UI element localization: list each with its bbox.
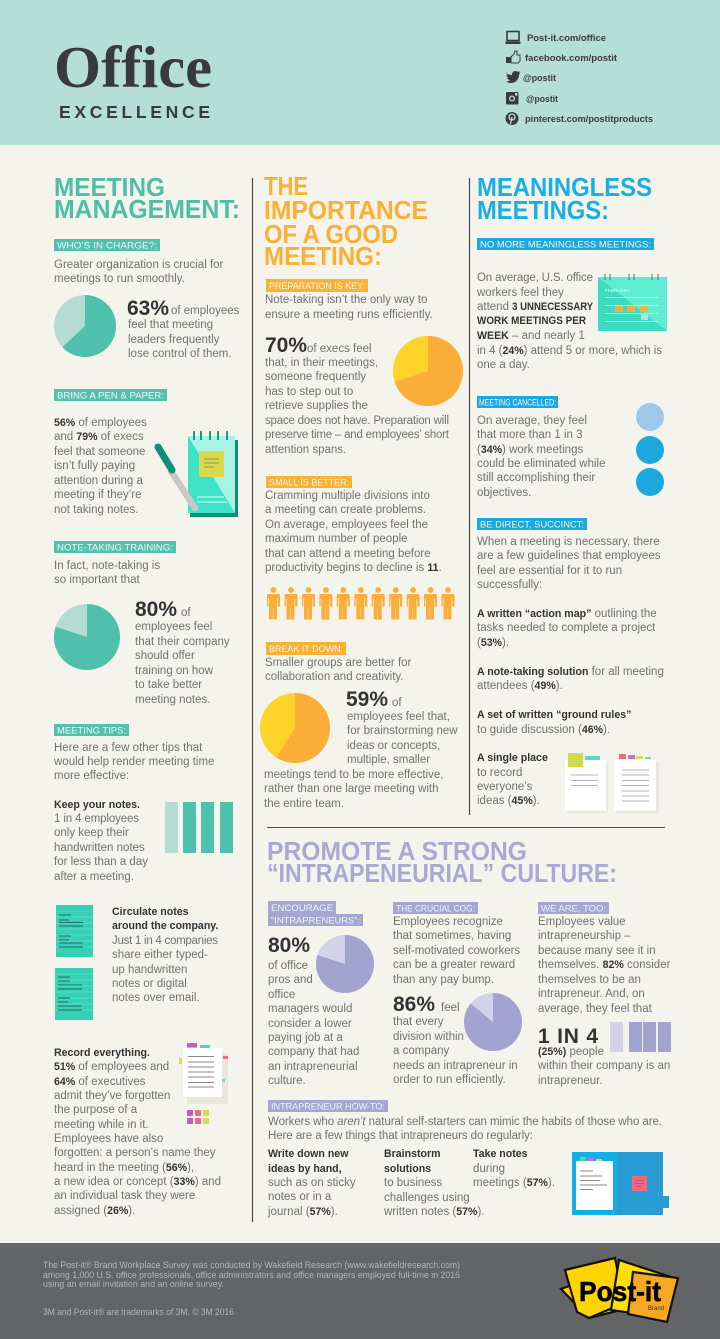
- heading: IMPORTANCE: [264, 197, 428, 225]
- heading: MANAGEMENT:: [54, 196, 240, 224]
- text block: Employees value: [538, 916, 626, 928]
- tip: record everything: the purpose of a: [54, 1104, 138, 1116]
- icon: thumbs up: [506, 51, 520, 63]
- guideline: action map: [477, 608, 657, 649]
- stat: 86%: that every: [393, 1016, 444, 1028]
- heading: [54, 174, 240, 224]
- text block: and 79% of execs: [54, 431, 144, 443]
- survey note: The Post-it® Brand Workplace Survey was conducted by Wakefield Research (www.wakefieldresearch.com): [43, 1260, 460, 1270]
- text block: more effective:: [54, 770, 129, 782]
- link: pinterest: pinterest.com/postitproducts: [525, 114, 653, 124]
- text block: because many see it in: [538, 945, 656, 957]
- pie chart: 70%: [393, 336, 463, 406]
- icon: instagram: [506, 92, 518, 104]
- tag: the crucial cog: THE CRUCIAL COG:: [396, 902, 475, 914]
- tag: encourage intrapreneurs: ENCOURAGE: [271, 902, 333, 913]
- text block: Note-taking isn’t the only way to: [265, 294, 427, 306]
- pie chart: 86%: [464, 993, 522, 1051]
- tip: circulate notes: [112, 906, 218, 1004]
- bar graphic: 1 in 4: [610, 1022, 671, 1052]
- text block: attend 3 UNNECESSARY: [477, 301, 593, 313]
- heading: PROMOTE A STRONG: [267, 838, 527, 866]
- guideline: action map: tasks needed to complete a project: [477, 622, 656, 634]
- tip: circulate notes: share either typed-: [112, 949, 208, 961]
- text block: [393, 916, 520, 986]
- habit: brainstorm: challenges using: [384, 1192, 470, 1204]
- habit: take notes: [473, 1148, 555, 1189]
- habit: write down ideas: [267, 1148, 356, 1218]
- text block: [54, 560, 160, 586]
- logo: Post-it Brand: [561, 1258, 678, 1322]
- stat: 70%: retrieve supplies the: [265, 400, 368, 412]
- text block: ensure a meeting runs efficiently.: [265, 309, 433, 321]
- tag: meeting tips: MEETING TIPS:: [57, 724, 126, 736]
- pie chart: 63%: [54, 295, 116, 357]
- tip: circulate notes: notes over email.: [112, 992, 200, 1004]
- stat: 63%: leaders frequently: [128, 334, 220, 346]
- text block: self-motivated coworkers: [393, 945, 520, 957]
- tag: small is better: SMALL IS BETTER:: [269, 476, 349, 488]
- guideline: single place: [477, 752, 548, 807]
- stat: 80%: company that had: [268, 1046, 359, 1058]
- tip: circulate notes: Circulate notes: [112, 906, 189, 918]
- text block: [268, 1116, 662, 1142]
- stat: 80%: 80%: [268, 934, 310, 957]
- panel: intrapreneurial culture: [267, 838, 671, 1218]
- header band: [0, 0, 720, 145]
- stat: 63%: feel that meeting: [128, 319, 213, 331]
- stat: 80%: employees feel: [135, 621, 212, 633]
- text block: intrapreneur. And, on: [538, 988, 645, 1000]
- stat: 59%: of: [392, 697, 402, 709]
- text block: maximum number of people: [265, 533, 408, 545]
- habit: brainstorm: [383, 1148, 484, 1218]
- heading: [267, 838, 617, 888]
- tag: note-taking training: NOTE-TAKING TRAINING:: [57, 542, 173, 552]
- text block: would help render meeting time: [53, 756, 214, 768]
- tip: record everything: Employees have also: [54, 1133, 163, 1145]
- tip: circulate notes: around the company.: [112, 920, 218, 932]
- stat: 80%: culture.: [268, 1075, 306, 1087]
- pie chart: 80%: [316, 935, 374, 993]
- icon: folder: [572, 1152, 669, 1215]
- stat: 1 in 4: [537, 1025, 670, 1087]
- text block: WEEK – and nearly 1: [477, 330, 585, 342]
- stat: 59%: meetings tend to be more effective,: [264, 769, 443, 781]
- text block: one a day.: [477, 359, 530, 371]
- text block: Workers who aren’t natural self-starters can mimic the habits of those who are.: [268, 1116, 662, 1128]
- text block: Cramming multiple divisions into: [265, 490, 430, 502]
- stat: 80%: paying job at a: [268, 1032, 343, 1044]
- tip: keep your notes: 1 in 4 employees: [54, 813, 139, 825]
- tip: record everything: forgotten: a person’s name they: [54, 1147, 216, 1159]
- habit: write down ideas: such as on sticky: [268, 1177, 356, 1189]
- text block: a meeting can create problems.: [265, 504, 426, 516]
- tag: meeting cancelled: [477, 396, 558, 408]
- habit: brainstorm: to business: [384, 1177, 442, 1189]
- text block: On average, employees feel the: [265, 519, 428, 531]
- stat: 86%: order to run efficiently.: [393, 1074, 506, 1086]
- text block: meetings to run smoothly.: [54, 273, 185, 285]
- tip: circulate notes: up handwritten: [112, 964, 187, 976]
- guideline: note-taking solution: attendees (49%).: [477, 680, 563, 692]
- text block: On average, they feel: [477, 415, 587, 427]
- stat: 70%: 70%: [265, 334, 307, 357]
- tip: circulate notes: Just 1 in 4 companies: [112, 935, 218, 947]
- text block: themselves to be an: [538, 974, 641, 986]
- tip: record everything: assigned (26%).: [54, 1205, 135, 1217]
- habit: take notes: Take notes: [473, 1148, 528, 1160]
- stat: 80%: 80%: [135, 598, 177, 621]
- stat: 80%: pros and: [268, 974, 313, 986]
- tip: keep your notes: [54, 799, 148, 883]
- tag: be direct, succinct: BE DIRECT, SUCCINCT:: [480, 518, 584, 530]
- guideline: single place: ideas (45%).: [477, 795, 540, 807]
- tag: who's in charge: WHO’S IN CHARGE?:: [57, 240, 157, 250]
- heading: MEETING:: [264, 243, 382, 271]
- stat: 59%: 59%: [346, 688, 388, 711]
- tag: preparation is key: PREPARATION IS KEY:: [269, 280, 365, 291]
- text block: attention during a: [54, 475, 143, 487]
- icon: notepad and pen: [158, 431, 238, 517]
- heading: MEETINGS:: [477, 197, 609, 225]
- heading: MEETING: [54, 174, 165, 202]
- text block: are a few guidelines that employees: [477, 550, 661, 562]
- panel: meeting management: [53, 174, 240, 1217]
- stat: 80%: meeting notes.: [135, 694, 210, 706]
- survey note: among 1,000 U.S. office professionals, office administrators and office managers employed full-time in 2016: [43, 1270, 460, 1280]
- tag: no more meaningless meetings: NO MORE MEANINGLESS MEETINGS:: [480, 238, 651, 250]
- habit: write down ideas: notes or in a: [268, 1191, 332, 1203]
- text block: Employees recognize: [393, 916, 503, 928]
- stat: 80%: an intrapreneurial: [268, 1061, 358, 1073]
- text block: can be a greater reward: [393, 959, 515, 971]
- text block: so important that: [54, 574, 140, 586]
- tip: circulate notes: notes or digital: [112, 978, 187, 990]
- text block: successfully:: [477, 579, 542, 591]
- icon: note cards: [55, 905, 93, 1020]
- text block: [265, 490, 442, 574]
- stat: 86%: 86%: [393, 993, 435, 1016]
- text block: still accomplishing their: [477, 472, 595, 484]
- text block: not taking notes.: [54, 504, 138, 516]
- habit: brainstorm: written notes (57%).: [383, 1206, 484, 1218]
- text block: [476, 272, 662, 371]
- icon: twitter bird: [506, 71, 520, 83]
- icon: calendar: [598, 274, 667, 331]
- social links: [506, 32, 653, 125]
- stat: 59%: the entire team.: [264, 798, 344, 810]
- icon: laptop: [506, 32, 520, 44]
- stat: 80%: managers would: [268, 1003, 352, 1015]
- tip: keep your notes: after a meeting.: [54, 871, 134, 883]
- bar graphic: 1 in 4: [165, 802, 233, 853]
- icon: document with flags: [179, 1043, 228, 1124]
- logo: Post-it Brand: Post-it: [579, 1276, 661, 1307]
- habit: take notes: meetings (57%).: [473, 1177, 555, 1189]
- stat: 86%: needs an intrapreneur in: [393, 1060, 518, 1072]
- guideline: action map: (53%).: [477, 637, 509, 649]
- tip: keep your notes: Keep your notes.: [54, 799, 140, 811]
- icon: calendar: FEBRUARY: [605, 288, 630, 293]
- stat: 86%: a company: [393, 1045, 450, 1057]
- tip: record everything: an individual task they were: [54, 1190, 195, 1202]
- link: facebook: facebook.com/postit: [525, 53, 617, 63]
- stat: 80%: office: [268, 989, 295, 1001]
- text block: WORK MEETINGS PER: [477, 315, 586, 327]
- stat: 59%: ideas or concepts,: [347, 740, 440, 752]
- stat: 70%: has to step out to: [265, 386, 353, 398]
- panel: importance of a good meeting: [260, 173, 463, 810]
- stat: 59%: for brainstorming new: [347, 725, 458, 737]
- text block: in 4 (24%) attend 5 or more, which is: [477, 345, 662, 357]
- guideline: ground rules: [477, 709, 631, 736]
- text block: [477, 415, 606, 499]
- guideline: ground rules: to guide discussion (46%).: [477, 724, 610, 736]
- text block: [538, 916, 671, 1015]
- stat: 86%: [393, 993, 518, 1086]
- stat: 80%: of: [181, 607, 191, 619]
- stat: 80%: to take better: [135, 679, 202, 691]
- text block: Here are a few things that intrapreneurs do regularly:: [268, 1130, 533, 1142]
- tag: intrapreneur how-to: INTRAPRENEUR HOW-TO:: [271, 1100, 385, 1112]
- survey note: using an email invitation and an online survey.: [43, 1279, 224, 1289]
- text block: workers feel they: [476, 287, 564, 299]
- text block: intrapreneurship –: [538, 930, 631, 942]
- stat: 1 in 4: within their company is an: [537, 1060, 670, 1072]
- tip: record everything: admit they’ve forgotten: [54, 1090, 170, 1102]
- heading: OF A GOOD: [264, 221, 398, 249]
- footer band: [0, 1243, 720, 1339]
- survey note: [43, 1260, 460, 1289]
- habit: write down ideas: journal (57%).: [267, 1206, 338, 1218]
- habit: write down ideas: ideas by hand,: [268, 1163, 342, 1175]
- heading: THE: [264, 173, 308, 201]
- text block: than any pay bump.: [393, 974, 494, 986]
- text block: average, they feel that: [538, 1003, 653, 1015]
- text block: In fact, note-taking is: [54, 560, 160, 572]
- stat: 80%: training on how: [135, 665, 214, 677]
- tip: record everything: meeting while in it.: [54, 1119, 149, 1131]
- dots: 1 in 3: [636, 403, 664, 496]
- stat: 63%: of employees: [171, 305, 240, 317]
- text block: themselves. 82% consider: [538, 959, 671, 971]
- stat: 63%: [127, 297, 240, 360]
- stat: 70%: preserve time – and employees’ short: [265, 429, 450, 441]
- text block: On average, U.S. office: [477, 272, 593, 284]
- habit: write down ideas: Write down new: [268, 1148, 349, 1160]
- stat: 59%: multiple, smaller: [347, 754, 430, 766]
- stat: 80%: that their company: [135, 636, 230, 648]
- icon: pinterest: [506, 112, 518, 125]
- stat: 63%: lose control of them.: [128, 348, 232, 360]
- guideline: action map: A written “action map” outlining the: [477, 608, 657, 620]
- stat: 70%: that, in their meetings,: [265, 357, 378, 369]
- tip: record everything: Record everything.: [54, 1047, 150, 1059]
- stat: 80%: of office: [268, 960, 308, 972]
- stat: 70%: attention spans.: [265, 444, 346, 456]
- panel: meaningless meetings: [476, 174, 667, 813]
- tag: meeting cancelled: MEETING CANCELLED:: [479, 396, 556, 408]
- tag: break it down: BREAK IT DOWN:: [269, 643, 343, 654]
- icon: sheets with sticky notes: [565, 753, 659, 813]
- stat: 1 in 4: intrapreneur.: [538, 1075, 603, 1087]
- stat: 59%: rather than one large meeting with: [264, 783, 439, 795]
- stat: 86%: division within: [393, 1031, 464, 1043]
- guideline: single place: everyone’s: [477, 781, 533, 793]
- tag: encourage intrapreneurs: [268, 901, 363, 926]
- text block: 56% of employees: [54, 417, 147, 429]
- tip: record everything: a new idea or concept (33%) and: [54, 1176, 221, 1188]
- text block: isn’t fully paying: [54, 460, 135, 472]
- link: twitter: @postit: [523, 73, 556, 83]
- stat: 1 in 4: 1 IN 4: [538, 1025, 598, 1048]
- text block: [265, 657, 412, 683]
- text block: When a meeting is necessary, there: [477, 536, 660, 548]
- subtitle: EXCELLENCE: [59, 102, 210, 122]
- text block: objectives.: [477, 487, 531, 499]
- icon row: 11 people: [267, 587, 454, 620]
- tip: record everything: heard in the meeting (56%),: [54, 1162, 194, 1174]
- text block: productivity begins to decline is 11.: [265, 562, 442, 574]
- heading: [477, 174, 652, 225]
- tip: record everything: 64% of executives: [54, 1076, 146, 1088]
- text block: [265, 294, 433, 321]
- tag: bring a pen and paper: BRING A PEN & PAPER:: [57, 390, 164, 400]
- text block: could be eliminated while: [477, 458, 606, 470]
- heading: MEANINGLESS: [477, 174, 652, 202]
- tip: keep your notes: only keep their: [54, 827, 129, 839]
- stat: 1 in 4: (25%) people: [538, 1046, 604, 1058]
- pie chart: 80%: [54, 604, 120, 670]
- title: Office: [54, 34, 212, 100]
- stat: 70%: [265, 334, 450, 456]
- text block: Greater organization is crucial for: [54, 259, 224, 271]
- text block: Smaller groups are better for: [265, 657, 412, 669]
- text block: that sometimes, having: [393, 930, 511, 942]
- column dividers: [252, 178, 665, 1222]
- text block: [54, 417, 147, 516]
- heading: [264, 173, 428, 271]
- text block: feel are essential for it to run: [477, 565, 622, 577]
- text block: meeting if they’re: [54, 489, 142, 501]
- guideline: single place: A single place: [477, 752, 548, 764]
- link: website: Post-it.com/office: [527, 33, 606, 43]
- guideline: note-taking solution: [477, 666, 664, 692]
- text block: collaboration and creativity.: [265, 671, 404, 683]
- stat: 70%: of execs feel: [307, 343, 372, 355]
- pie chart: 59%: [260, 693, 330, 763]
- text block: (34%) work meetings: [477, 444, 583, 456]
- stat: 63%: 63%: [127, 297, 169, 320]
- stat: 59%: employees feel that,: [347, 711, 450, 723]
- guideline: single place: to record: [477, 767, 522, 779]
- stat: 70%: space does not have. Preparation will: [265, 415, 449, 427]
- stat: 80%: [268, 934, 359, 1087]
- text block: [54, 259, 224, 285]
- text block: [53, 742, 214, 782]
- tag: we are, too: WE ARE, TOO:: [541, 902, 606, 914]
- tip: keep your notes: handwritten notes: [54, 842, 145, 854]
- text block: [477, 536, 661, 591]
- stat: 80%: should offer: [135, 650, 195, 662]
- text block: that more than 1 in 3: [477, 429, 582, 441]
- tip: record everything: [54, 1047, 221, 1217]
- stat: 80%: [135, 598, 230, 706]
- trademark note: 3M and Post-it® are trademarks of 3M. © 3M 2016: [43, 1307, 234, 1317]
- heading: “INTRAPENEURIAL” CULTURE:: [267, 860, 617, 888]
- link: instagram: @postit: [526, 94, 558, 104]
- guideline: note-taking solution: A note-taking solution for all meeting: [477, 666, 664, 678]
- text block: feel that someone: [54, 446, 145, 458]
- stat: 80%: consider a lower: [268, 1018, 352, 1030]
- tip: record everything: 51% of employees and: [54, 1061, 169, 1073]
- text block: that can attend a meeting before: [265, 548, 431, 560]
- habit: brainstorm: Brainstorm: [384, 1148, 441, 1160]
- habit: brainstorm: solutions: [384, 1163, 431, 1175]
- stat: 70%: someone frequently: [265, 371, 366, 383]
- stat: 59%: [264, 688, 458, 810]
- stat: 86%: feel: [441, 1002, 460, 1014]
- tip: keep your notes: for less than a day: [54, 856, 148, 868]
- text block: Here are a few other tips that: [54, 742, 203, 754]
- logo: Post-it Brand: Brand: [648, 1306, 664, 1312]
- habit: take notes: during: [473, 1163, 505, 1175]
- tag: encourage intrapreneurs: “INTRAPRENEURS”:: [271, 914, 360, 926]
- guideline: ground rules: A set of written “ground rules”: [477, 709, 631, 721]
